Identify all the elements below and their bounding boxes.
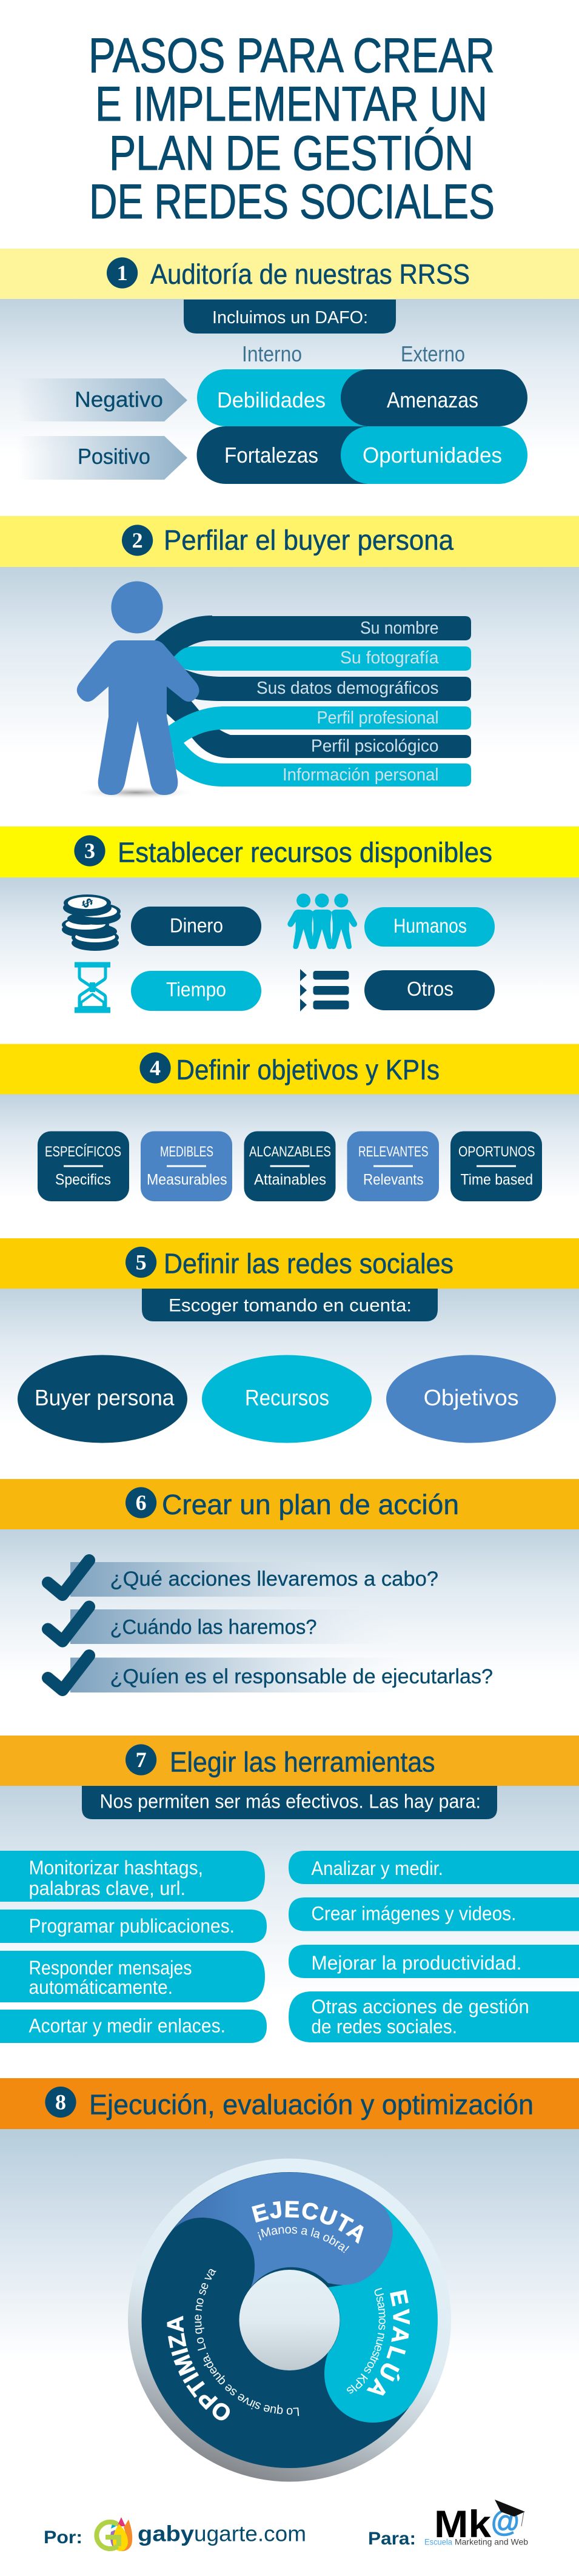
ribbon labels: Perfil profesional [316, 708, 439, 728]
DAFO matrix: Fortalezas [224, 443, 318, 468]
arrow: Negativo: Negativo [75, 387, 163, 412]
left list of tools: Programar publicaciones. [29, 1915, 235, 1937]
pill: Humanos: Humanos [393, 914, 467, 937]
DAFO matrix: Oportunidades [363, 443, 502, 468]
heading band 5 [0, 1238, 579, 1289]
heading band 2: Perfilar el buyer persona [164, 525, 453, 556]
heading band 1 [0, 249, 579, 299]
checklist item 1 [48, 1560, 438, 1597]
right list of tools: Mejorar la productividad. [311, 1952, 521, 1974]
ribbon labels: Su fotografía [340, 648, 439, 668]
card: Alcanzables [244, 1132, 336, 1201]
heading band 2: 2 [132, 528, 143, 552]
ribbon labels: Perfil psicológico [311, 736, 439, 756]
column labels [242, 341, 465, 366]
tools tab: Nos permiten ser más efectivos. Las hay para: [99, 1791, 481, 1813]
icon: list [300, 969, 349, 1011]
ellipse: Objetivos [386, 1355, 556, 1443]
heading band 7 [0, 1736, 579, 1786]
title: E IMPLEMENTAR UN [95, 77, 487, 132]
arrow: Positivo [18, 436, 187, 480]
heading band 3 [0, 827, 579, 877]
panel: step 8 execution [0, 2078, 579, 2551]
card: Específicos: Specifics [55, 1172, 111, 1189]
logo: Mk@: @ [490, 2504, 520, 2538]
pill: Tiempo: Tiempo [166, 978, 226, 1001]
column labels: Externo [401, 341, 465, 366]
pill: Tiempo [131, 971, 261, 1011]
heading band 6: Crear un plan de acción [162, 1489, 459, 1520]
DAFO matrix: Amenazas [387, 387, 478, 412]
heading band 5: 5 [136, 1250, 147, 1275]
card: Específicos: ESPECÍFICOS [45, 1144, 121, 1160]
DAFO tab [184, 300, 396, 334]
card: Alcanzables: ALCANZABLES [249, 1144, 331, 1160]
heading band 2 [0, 516, 579, 567]
ribbon labels [256, 619, 439, 785]
credit: Para [368, 2500, 528, 2549]
ellipse: Recursos: Recursos [245, 1385, 329, 1410]
ellipse: Objetivos: Objetivos [424, 1385, 519, 1410]
logo: gabyugarte: ugarte.com [194, 2521, 306, 2546]
icon: coins: $ [78, 896, 96, 911]
heading band 8: 8 [55, 2090, 66, 2114]
logo: Mk@: Marketing and Web [455, 2537, 528, 2547]
panel: step 4 objectives [0, 1044, 579, 1238]
arrow: Negativo [18, 378, 187, 421]
panel background 5 [0, 1289, 579, 1479]
right list of tools: Crear imágenes y videos. [311, 1903, 516, 1925]
ellipse: Buyer persona: Buyer persona [35, 1385, 175, 1410]
ribbon labels: Información personal [283, 765, 439, 785]
DAFO matrix: Debilidades [217, 387, 326, 412]
centre hole [239, 2270, 340, 2370]
checklist item 2 [48, 1607, 398, 1644]
card: Medibles: Measurables [147, 1172, 227, 1189]
panel background 6 [0, 1529, 579, 1736]
segment: ejecuta: EJECUTA [252, 2201, 364, 2244]
card: Relevantes: RELEVANTES [358, 1144, 428, 1160]
heading band 6 [0, 1479, 579, 1529]
panel: step 2 buyer persona [0, 516, 579, 827]
segment: optimiza: Lo que sirve se queda. Lo que no se va [195, 2269, 300, 2416]
panel: step 5 social networks [0, 1238, 579, 1479]
panel: step 7 tools [0, 1736, 579, 2078]
pill: Otros: Otros [407, 978, 453, 1000]
heading band 8: Ejecución, evaluación y optimización [89, 2088, 534, 2120]
DAFO tab: Incluimos un DAFO: [212, 308, 368, 327]
card: Oportunos: Time based [461, 1172, 533, 1189]
card: Específicos [38, 1132, 129, 1201]
right list of tools: Analizar y medir. [311, 1857, 443, 1879]
panel background 4 [0, 1094, 579, 1238]
left list of tools: palabras clave, url. [29, 1877, 186, 1899]
logo: gabyugarte [96, 2517, 306, 2551]
card: Relevantes [347, 1132, 439, 1201]
left list of tools: Responder mensajes [29, 1957, 192, 1979]
checklist item 3 [48, 1655, 493, 1692]
heading band 1: Auditoría de nuestras RRSS [150, 258, 470, 290]
icon: coins [62, 894, 121, 951]
heading band 7: 7 [136, 1748, 147, 1772]
left list of tools: Acortar y medir enlaces. [29, 2014, 226, 2036]
left list of tools: Monitorizar hashtags, [29, 1857, 203, 1879]
ribbon labels: Su nombre [360, 619, 439, 638]
panel: step 1 audit [0, 249, 579, 516]
pill: Humanos [364, 907, 495, 947]
right list of tools [289, 1851, 579, 2042]
segment: ejecuta [173, 2172, 393, 2287]
card: Oportunos [450, 1132, 542, 1201]
card: Medibles: MEDIBLES [160, 1144, 213, 1160]
left list of tools [0, 1851, 267, 2043]
heading band 5: Definir las redes sociales [164, 1248, 453, 1280]
card: Alcanzables: Attainables [254, 1172, 326, 1189]
panel: step 6 action plan [0, 1479, 579, 1736]
left list of tools: automáticamente. [29, 1976, 173, 1998]
panel background 2 [0, 567, 579, 827]
arrow: Positivo: Positivo [78, 444, 150, 469]
heading band 6: 6 [136, 1491, 147, 1515]
heading band 4 [0, 1044, 579, 1094]
icon: hourglass [75, 962, 110, 1013]
segment: evalúa: EVALÚA [366, 2290, 410, 2395]
heading band 3: 3 [84, 839, 95, 863]
card: Medibles [141, 1132, 232, 1201]
heading band 8 [0, 2078, 579, 2129]
panel background 8 [0, 2129, 579, 2576]
Escoger tab: Escoger tomando en cuenta: [169, 1295, 412, 1316]
segment: optimiza: OPTIMIZA [167, 2315, 230, 2421]
panel background 1 [0, 299, 579, 516]
checklist item 1: ¿Qué acciones llevaremos a cabo? [110, 1568, 438, 1591]
segment: evalúa: Usamos nuestros KPIs [347, 2287, 386, 2394]
right list of tools: Otras acciones de gestión [311, 1996, 529, 2018]
pill: Dinero: Dinero [170, 914, 223, 936]
ribbon labels: Sus datos demográficos [256, 679, 439, 698]
ellipse: Buyer persona [18, 1355, 187, 1443]
tools tab [82, 1786, 497, 1819]
logo: gabyugarte: gaby [138, 2521, 194, 2546]
ellipse: Recursos [202, 1355, 372, 1443]
panel background 7 [0, 1786, 579, 2078]
panel background 3 [0, 877, 579, 1044]
pill: Otros [364, 970, 495, 1010]
DAFO matrix [196, 369, 527, 484]
credit: Para: Para: [368, 2529, 416, 2549]
ribbons [155, 615, 471, 787]
right list of tools: de redes sociales. [311, 2016, 457, 2038]
icon: people [287, 894, 357, 949]
card: Relevantes: Relevants [363, 1172, 424, 1189]
heading band 7: Elegir las herramientas [170, 1746, 435, 1778]
heading band 4: 4 [150, 1056, 161, 1080]
heading band 1: 1 [117, 261, 128, 285]
checklist item 2: ¿Cuándo las haremos? [110, 1616, 316, 1639]
credit: Por: Por: [44, 2527, 82, 2547]
logo: Mk@: Escuela [424, 2537, 452, 2547]
segment: ejecuta: ¡Manos a la obra! [257, 2227, 349, 2253]
segment: evalúa [324, 2203, 438, 2423]
panel: step 3 resources [0, 827, 579, 1044]
card: Oportunos: OPORTUNOS [458, 1144, 535, 1160]
logo: Mk@: Mk [434, 2503, 492, 2546]
Escoger tab [142, 1289, 438, 1321]
column labels: Interno [242, 341, 302, 366]
title: PASOS PARA CREAR [89, 29, 495, 83]
cycle diagram [128, 2159, 451, 2481]
heading band 3: Establecer recursos disponibles [118, 837, 492, 868]
logo: Mk@ [424, 2500, 528, 2547]
checklist item 3: ¿Quíen es el responsable de ejecutarlas? [110, 1665, 493, 1688]
title [89, 29, 495, 229]
pill: Dinero [131, 907, 261, 946]
icon: person [76, 581, 199, 799]
title: PLAN DE GESTIÓN [109, 126, 474, 181]
heading band 4: Definir objetivos y KPIs [176, 1054, 440, 1085]
credit: Por [44, 2517, 306, 2551]
